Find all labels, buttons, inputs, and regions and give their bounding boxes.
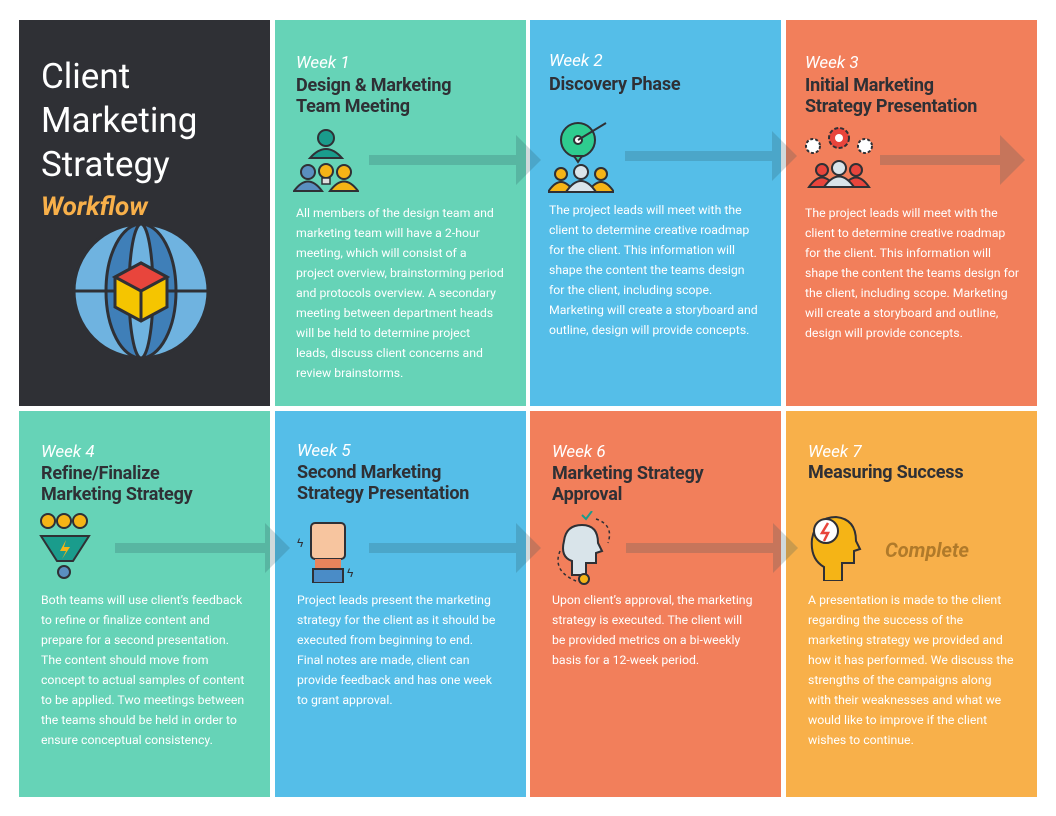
- panel: week 1: leads, discuss client concerns and: [296, 347, 483, 361]
- panel: week 1: [275, 20, 526, 406]
- panel: week 1: Team Meeting: [296, 96, 410, 117]
- icon: team meeting: [293, 129, 359, 192]
- panel: week 1: project overview, brainstorming period: [296, 267, 504, 281]
- panel: week 7: wishes to continue.: [808, 734, 914, 748]
- panel: week 5: Strategy Presentation: [297, 483, 469, 504]
- panel: week 4: the teams should be held in order to: [41, 714, 237, 728]
- panel: week 2: Week 2: [549, 51, 603, 71]
- panel: week 7: would like to improve if the client: [808, 714, 987, 728]
- panel: week 3: will create a storyboard and outline,: [805, 307, 998, 321]
- panel: week 2: Discovery Phase: [549, 74, 680, 95]
- panel: week 5: [275, 411, 526, 797]
- panel: week 3: Strategy Presentation: [805, 96, 977, 117]
- panel: week 3: shape the content the teams design for: [805, 267, 1019, 281]
- label: complete: Complete: [885, 538, 969, 562]
- panel: week 4: Week 4: [41, 442, 95, 462]
- panel: week 5: executed from beginning to end.: [297, 634, 473, 648]
- panel: week 2: for the client, including scope.: [549, 284, 712, 298]
- panel: week 7: Measuring Success: [808, 462, 963, 483]
- panel: week 4: Refine/Finalize: [41, 463, 160, 484]
- panel: week 1: meeting, which will consist of a: [296, 247, 467, 261]
- title: Strategy: [41, 144, 170, 185]
- panel: week 5: Second Marketing: [297, 462, 441, 483]
- panel: week 5: strategy for the client as it should be: [297, 614, 495, 628]
- panel: week 4: [19, 411, 270, 797]
- panel: title: [19, 20, 270, 406]
- panel: week 6: Upon client’s approval, the marketing: [552, 594, 753, 608]
- panel: week 1: and protocols overview. A secondary: [296, 287, 496, 301]
- panel: week 4: Marketing Strategy: [41, 484, 193, 505]
- icon: thinking head: [810, 516, 862, 581]
- panel: week 7: Week 7: [808, 442, 862, 462]
- panel: week 4: to be applied. Two meetings between: [41, 694, 244, 708]
- panel: week 4: The content should move from: [41, 654, 208, 668]
- panel: week 1: meeting between department heads: [296, 307, 493, 321]
- panel: week 7: regarding the success of the: [808, 614, 963, 628]
- icon: fist: ϟ: [297, 536, 304, 550]
- title: Client: [41, 56, 130, 97]
- panel: week 3: for the client. This information will: [805, 247, 991, 261]
- panel: week 6: be provided metrics on a bi-weekly: [552, 634, 740, 648]
- panel: week 2: shape the content the teams design: [549, 264, 745, 278]
- panel: week 1: marketing team will have a 2-hour: [296, 227, 480, 241]
- panel: week 6: [530, 411, 781, 797]
- panel: week 3: client to determine creative roadmap: [805, 227, 1005, 241]
- panel: week 4: ensure conceptual consistency.: [41, 734, 213, 748]
- panel: week 4: to refine or finalize content and: [41, 614, 210, 628]
- panel: week 5: to grant approval.: [297, 694, 393, 708]
- panel: week 7: marketing strategy we provided and: [808, 634, 1003, 648]
- icon: target discovery: [548, 122, 614, 193]
- panel: week 6: strategy is executed. The client will: [552, 614, 742, 628]
- panel: week 4: concept to actual samples of content: [41, 674, 244, 688]
- panel: week 7: with their weaknesses and what we: [808, 694, 1001, 708]
- panel: week 1: will be held to determine project: [296, 327, 470, 341]
- panel: week 1: Week 1: [296, 53, 350, 73]
- panel: week 4: prepare for a second presentation.: [41, 634, 229, 648]
- panel: week 2: outline, design will provide concepts.: [549, 324, 749, 338]
- panel: week 5: Week 5: [297, 441, 351, 461]
- icon: gears presentation: [805, 127, 873, 188]
- panel: week 4: Both teams will use client’s feedback: [41, 594, 242, 608]
- panel: week 7: [786, 411, 1037, 797]
- subtitle: Workflow: [41, 192, 148, 222]
- panel: week 3: design will provide concepts.: [805, 327, 963, 341]
- panel: week 3: Week 3: [805, 53, 859, 73]
- panel: week 3: the client, including scope. Marketing: [805, 287, 1008, 301]
- icon: globe with cube: [76, 226, 206, 356]
- panel: week 7: how it has performed. We discuss the: [808, 654, 1014, 668]
- panel: week 3: Initial Marketing: [805, 75, 934, 96]
- panel: week 1: Design & Marketing: [296, 75, 451, 96]
- panel: week 5: Final notes are made, client can: [297, 654, 469, 668]
- panel: week 6: Approval: [552, 484, 622, 505]
- panel: week 6: basis for a 12-week period.: [552, 654, 699, 668]
- panel: week 2: The project leads will meet with the: [549, 204, 742, 218]
- icon: fist: ϟ: [347, 566, 354, 580]
- title: [41, 56, 197, 185]
- panel: week 6: Marketing Strategy: [552, 463, 704, 484]
- panel: week 7: A presentation is made to the client: [808, 594, 1001, 608]
- panel: week 3: The project leads will meet with the: [805, 207, 998, 221]
- panel: week 2: for the client. This information will: [549, 244, 735, 258]
- title: Marketing: [41, 100, 197, 141]
- icon: head approval: [557, 511, 610, 585]
- panel: week 2: [530, 20, 781, 406]
- panel: week 6: Week 6: [552, 442, 606, 462]
- panel: week 2: client to determine creative roadmap: [549, 224, 749, 238]
- panel: week 3: [786, 20, 1037, 406]
- panel: week 1: review brainstorms.: [296, 367, 403, 381]
- panel: week 2: Marketing will create a storyboard and: [549, 304, 758, 318]
- panel: week 1: All members of the design team and: [296, 207, 494, 221]
- panel: week 5: Project leads present the marketing: [297, 594, 491, 608]
- panel: week 7: strengths of the campaigns along: [808, 674, 992, 688]
- icon: fist: [297, 522, 354, 583]
- icon: lightbulb funnel: [39, 513, 91, 579]
- panel: week 5: provide feedback and has one week: [297, 674, 492, 688]
